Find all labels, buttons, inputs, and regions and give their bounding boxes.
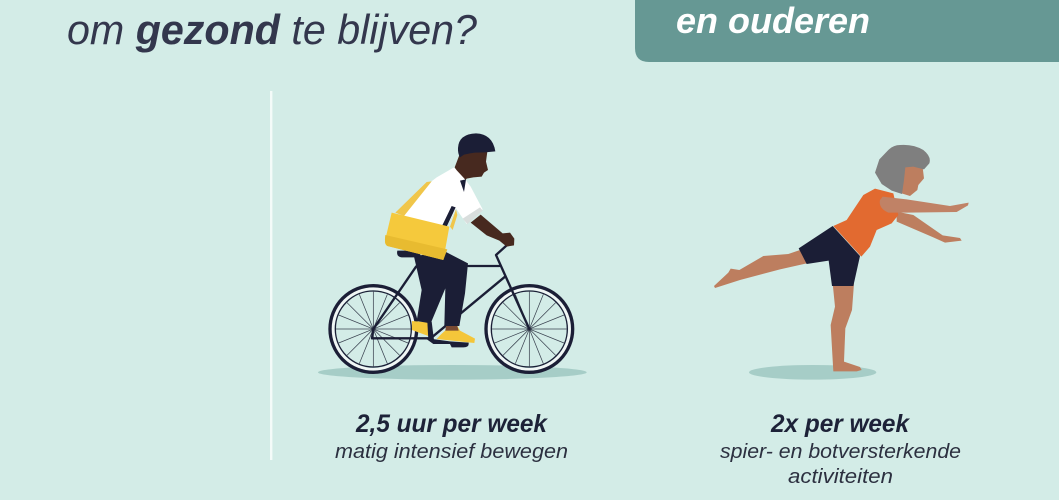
- text block: strength: [720, 410, 961, 488]
- near foot: [437, 326, 475, 343]
- icon: cyclist: [318, 133, 587, 380]
- ground shadow: [318, 365, 587, 380]
- rear wheel: [330, 286, 417, 372]
- panel: audience tab: [635, 0, 1059, 62]
- pedal: [425, 338, 469, 347]
- strength description: spier- en botversterkende: [720, 440, 961, 463]
- strength amount: 2x per week: [770, 410, 910, 438]
- tie: [442, 179, 466, 227]
- cycling description: matig intensief bewegen: [335, 440, 568, 463]
- far arm: [897, 212, 962, 243]
- bag: [385, 213, 449, 260]
- cycling amount: 2,5 uur per week: [355, 410, 548, 438]
- bicycle frame: [372, 245, 529, 338]
- tab heading: en ouderen: [676, 0, 870, 41]
- bag strap: [395, 181, 457, 230]
- ground shadow: [749, 365, 876, 380]
- strength description line 2: activiteiten: [788, 465, 893, 488]
- sleeve cuff: [463, 207, 483, 224]
- shorts: [799, 226, 860, 286]
- standing leg: [831, 283, 862, 371]
- trousers: [414, 251, 468, 326]
- front wheel: [486, 286, 573, 372]
- hair: [458, 133, 495, 157]
- divider line: [270, 91, 272, 460]
- far shoe: [412, 321, 430, 337]
- near arm: [880, 197, 969, 213]
- title: om gezond te blijven?: [67, 6, 478, 53]
- shirt: [404, 167, 483, 227]
- text block: cycling: [335, 410, 568, 463]
- torso: [833, 189, 898, 257]
- forearm: [471, 215, 514, 247]
- face: [902, 165, 924, 196]
- hair: [875, 145, 930, 194]
- icon: woman balancing: [714, 145, 969, 380]
- saddle: [397, 251, 422, 257]
- neck and head: [455, 152, 488, 182]
- raised leg: [714, 250, 807, 288]
